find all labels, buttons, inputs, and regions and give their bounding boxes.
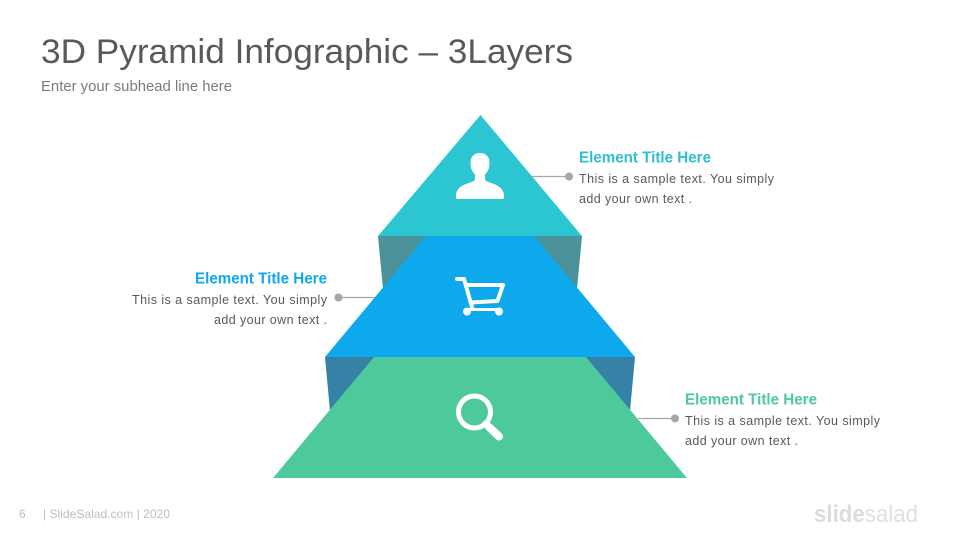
shadow: top layer — [378, 236, 582, 289]
layer: bottom — [273, 357, 687, 478]
callout text: This is a sample text. You simply — [132, 293, 328, 307]
callout text: add your own text . — [685, 434, 798, 448]
callout: bottom — [638, 392, 881, 448]
connector — [334, 294, 375, 302]
callout title: Element Title Here — [685, 392, 817, 408]
layer: middle — [325, 236, 635, 357]
callout text — [579, 172, 775, 206]
icon: person — [456, 153, 504, 199]
icon: shopping cart — [457, 279, 503, 314]
icon: magnifier — [458, 396, 499, 436]
callout text: add your own text . — [214, 313, 327, 327]
callout text: add your own text . — [579, 192, 692, 206]
layer: top — [378, 115, 582, 236]
callout text — [132, 293, 328, 327]
callout: middle — [132, 270, 375, 327]
logo: slidesalad — [814, 501, 918, 528]
callout text: This is a sample text. You simply — [685, 414, 881, 428]
callout: top — [532, 150, 775, 206]
callout title: Element Title Here — [195, 270, 327, 288]
connector — [638, 414, 679, 422]
callout title: Element Title Here — [579, 150, 711, 166]
title: 3D Pyramid Infographic – 3Layers — [41, 33, 573, 71]
callout text — [685, 414, 881, 448]
connector — [532, 172, 573, 180]
page number: 6 — [19, 507, 26, 521]
shadow: middle layer — [325, 357, 635, 411]
subhead: Enter your subhead line here — [41, 79, 232, 95]
callout text: This is a sample text. You simply — [579, 172, 775, 186]
footer text: | SlideSalad.com | 2020 — [43, 507, 170, 521]
pyramid — [273, 115, 687, 478]
